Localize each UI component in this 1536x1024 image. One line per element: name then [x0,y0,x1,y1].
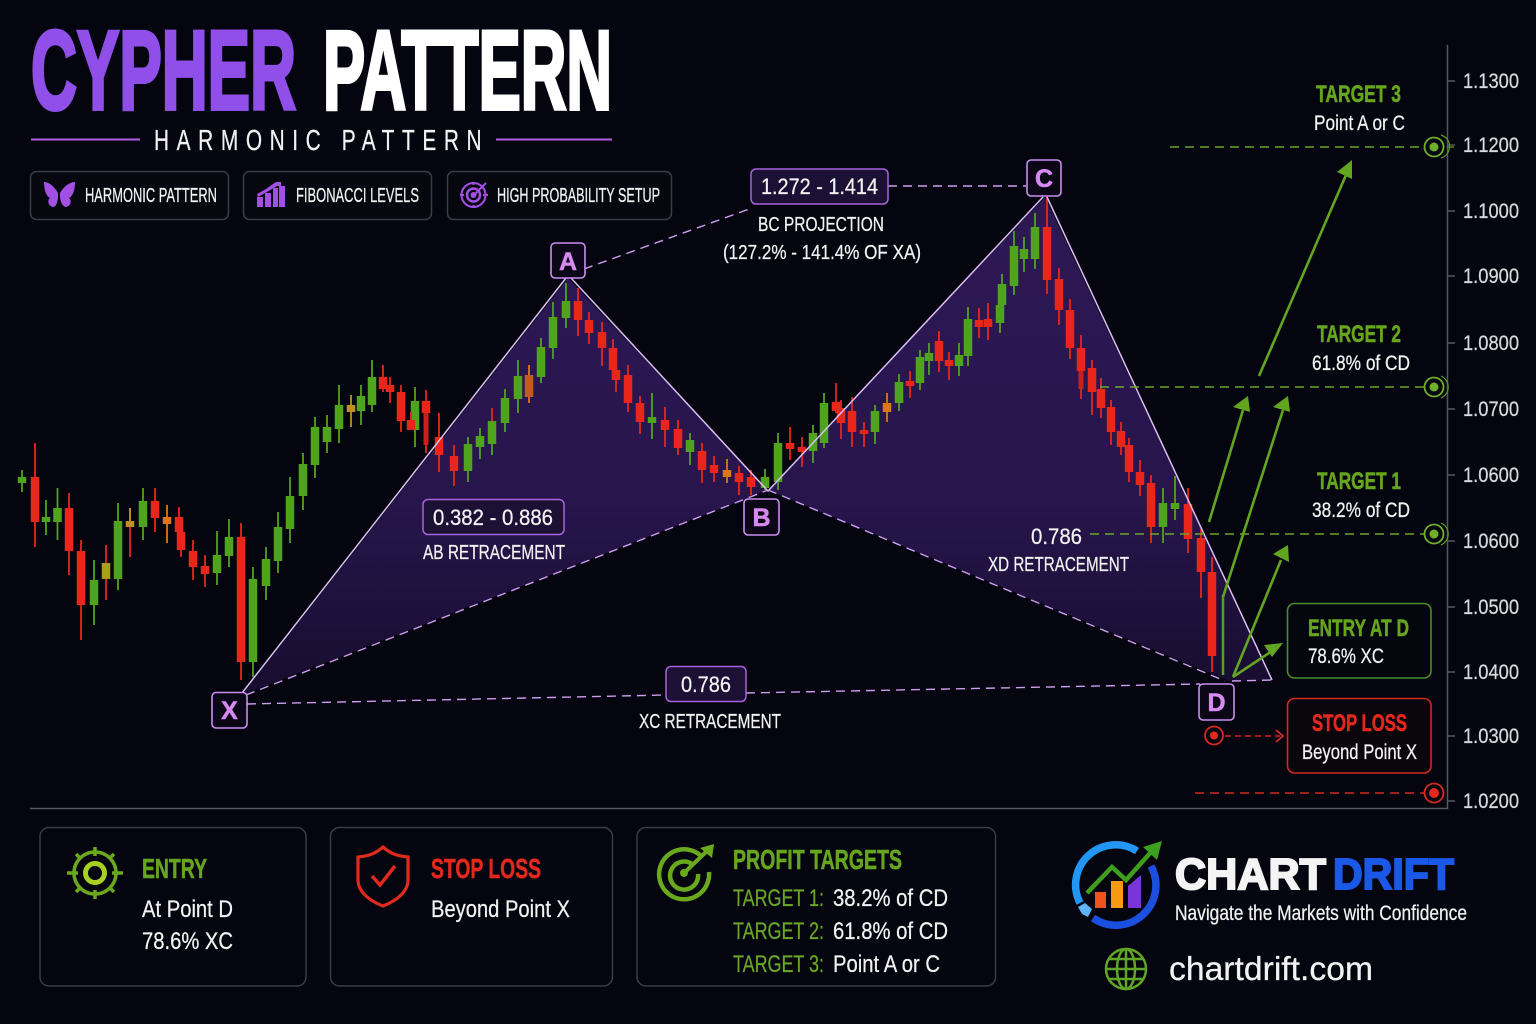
target 1 level: TARGET 1 [1317,468,1401,495]
point B [744,499,779,535]
dashed connection lines [246,186,1272,704]
price axis: 1.0600 [1463,530,1519,553]
icon: target [460,182,488,208]
website [1106,949,1373,989]
callout: BC projection: BC PROJECTION [758,214,884,236]
point C: C [1035,165,1053,193]
stop loss box: Beyond Point X [1302,741,1417,764]
tag: high probability setup [448,172,672,220]
price axis: 1.0400 [1463,661,1519,684]
pattern lines [242,197,1272,693]
price axis: 1.0700 [1463,398,1519,421]
callout: AB retracement [423,500,565,564]
panel: profit targets: TARGET 2: [733,918,824,945]
tag: harmonic pattern: HARMONIC PATTERN [85,185,217,207]
point D: D [1207,689,1226,717]
price axis: 1.0200 [1463,790,1519,813]
callout: XC retracement: 0.786 [681,672,731,697]
candlestick chart [22,197,1223,680]
panel: entry: ENTRY [142,853,207,884]
target 3 level [1170,81,1454,158]
icon: entry crosshair [67,847,123,899]
target 1 level [1090,468,1448,545]
target 2 level: TARGET 2 [1317,321,1401,348]
panel: profit targets [637,828,996,986]
target 2 level [1100,321,1448,398]
target 3 level: Point A or C [1314,112,1405,135]
panel: profit targets: 38.2% of CD [833,885,948,912]
icon: butterfly [44,182,75,207]
stop level [1195,784,1444,802]
tag: high probability setup: HIGH PROBABILITY SETUP [497,185,660,207]
price axis: 1.0600 [1463,464,1519,487]
panel: stop loss: Beyond Point X [431,896,570,923]
entry box: ENTRY AT D [1308,615,1409,642]
price axis: 1.1300 [1463,70,1519,93]
subtitle: HARMONIC PATTERN [154,125,482,157]
panel: entry [40,828,306,986]
target 1 level: 38.2% of CD [1312,499,1410,522]
icon: globe [1106,949,1146,989]
tag: harmonic pattern [30,172,228,220]
point A: A [559,248,577,276]
icon: rising bar chart [257,182,285,207]
callout: BC projection: 1.272 - 1.414 [761,174,878,199]
logo: chartdrift: Navigate the Markets with Confidence [1175,902,1467,925]
price axis [30,45,1519,813]
icon: target with arrow [659,844,714,899]
website: chartdrift.com [1169,950,1373,987]
callout: AB retracement: 0.382 - 0.886 [433,505,553,530]
price axis: 1.1200 [1463,134,1519,157]
callout: AB retracement: AB RETRACEMENT [423,542,565,564]
callout: XC retracement [639,666,781,733]
panel: profit targets: 61.8% of CD [833,918,948,945]
target 3 level: TARGET 3 [1316,81,1401,108]
callout: XD retracement: 0.786 [1031,524,1082,549]
callout: BC projection: (127.2% - 141.4% OF XA) [723,242,921,264]
panel: entry: At Point D [142,896,233,923]
price axis: 1.0900 [1463,265,1519,288]
panel: profit targets: TARGET 3: [733,951,824,978]
point D [1199,684,1234,720]
arrows: profit projections [1209,160,1352,677]
callout: XD retracement: XD RETRACEMENT [988,554,1129,576]
price axis: 1.0300 [1463,725,1519,748]
panel: profit targets: TARGET 1: [733,885,824,912]
stop loss box [1288,698,1431,773]
price axis: 1.0500 [1463,596,1519,619]
tag: fibonacci levels: FIBONACCI LEVELS [296,185,419,207]
icon: logo mark [1076,841,1162,925]
panel: stop loss: STOP LOSS [431,853,541,884]
stop marker with arrow [1205,726,1283,744]
tag: fibonacci levels [244,172,432,220]
target 2 level: 61.8% of CD [1312,352,1410,375]
price axis: 1.0800 [1463,332,1519,355]
title: CYPHER [31,8,296,133]
title: PATTERN [323,8,612,133]
logo: chartdrift: DRIFT [1333,850,1454,899]
logo: chartdrift: CHART [1175,850,1326,899]
panel: profit targets: Point A or C [833,951,940,978]
point A [551,243,585,278]
panel: stop loss [330,828,612,986]
stop loss box: STOP LOSS [1312,710,1407,737]
callout: XC retracement: XC RETRACEMENT [639,711,781,733]
panel: profit targets: PROFIT TARGETS [733,844,902,875]
pattern fill: XAB and BCD regions [242,197,1272,695]
panel: entry: 78.6% XC [142,928,233,955]
entry box: 78.6% XC [1308,645,1384,668]
icon: shield [358,847,408,906]
point X: X [221,697,238,725]
price axis: 1.1000 [1463,200,1519,223]
entry box [1288,604,1431,678]
callout: BC projection [723,169,921,264]
point B: B [752,504,771,532]
logo: chartdrift [1076,841,1467,925]
point X [212,692,247,728]
point C [1027,160,1061,196]
callout: XD retracement [988,524,1129,576]
